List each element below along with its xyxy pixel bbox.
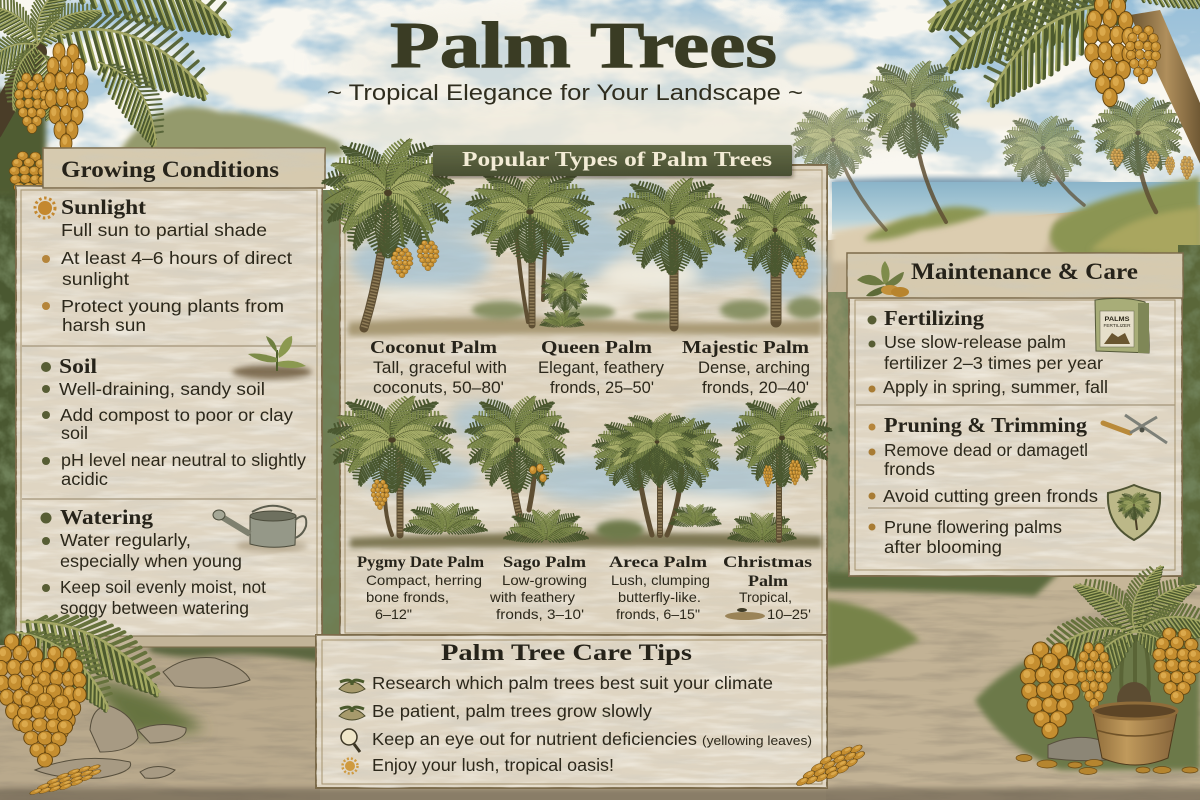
label: christmas palm: Tropical, <box>739 589 792 605</box>
header plank <box>847 253 1183 298</box>
label: queen palm: Elegant, feathery <box>538 359 665 377</box>
section: sunlight <box>35 195 292 335</box>
label: areca palm: butterfly-like. <box>618 589 701 605</box>
label: sago palm: with feathery <box>489 589 575 605</box>
label: pygmy date palm <box>357 554 485 622</box>
icon: fertilizer bag: PALMS <box>1104 317 1130 323</box>
label: sago palm: fronds, 3–10' <box>496 606 584 622</box>
heading: maintenance and care: Maintenance & Care <box>911 259 1138 284</box>
corner foliage: top right <box>928 0 1200 170</box>
banner: popular types heading: Popular Types of Palm Trees <box>462 147 772 171</box>
tree: fourth palm in upper row <box>730 186 820 322</box>
label: pygmy date palm: Pygmy Date Palm <box>357 554 485 571</box>
panel: palm tree care tips <box>316 635 827 788</box>
tree: pygmy date palm <box>326 390 488 540</box>
section: soil <box>41 336 312 489</box>
heading: watering: Watering <box>60 505 154 529</box>
heading: sunlight: Sunlight <box>61 195 146 219</box>
label: pygmy date palm: Compact, herring <box>366 572 482 588</box>
corner foliage: bottom left dates <box>0 597 176 800</box>
text: soil list: soil <box>61 423 88 443</box>
text: soil list: pH level near neutral to slightly <box>61 450 306 470</box>
icon: fertilizer bag: FERTILIZER <box>1104 323 1131 328</box>
heading: growing conditions: Growing Conditions <box>61 157 279 182</box>
label: areca palm: Lush, clumping <box>611 572 710 588</box>
label: queen palm: Queen Palm <box>541 337 652 357</box>
label: majestic palm: Dense, arching <box>698 359 810 377</box>
text: pruning list: Prune flowering palms <box>884 517 1062 537</box>
lower ground <box>0 645 320 800</box>
label: majestic palm: Majestic Palm <box>682 337 809 357</box>
label: areca palm: fronds, 6–15" <box>616 606 700 622</box>
text: sunlight list <box>42 220 292 335</box>
label: coconut palm: coconuts, 50–80' <box>373 379 504 397</box>
text: sunlight list: At least 4–6 hours of direct <box>61 248 292 268</box>
header plank <box>43 148 325 188</box>
panel: maintenance and care <box>847 253 1183 576</box>
text: soil list: acidic <box>61 469 108 489</box>
text: soil list: Well-draining, sandy soil <box>59 379 265 399</box>
label: coconut palm: Tall, graceful with <box>373 359 507 377</box>
side foliage <box>0 180 18 650</box>
icon: shield with palm <box>1108 485 1160 540</box>
icon: leaf and dates <box>857 261 909 297</box>
text: fertilizing list <box>868 332 1108 397</box>
text: pruning list: fronds <box>884 459 935 479</box>
text: pruning list: Avoid cutting green fronds <box>883 486 1098 506</box>
text: fertilizing list: Use slow-release palm <box>884 332 1066 352</box>
icon: seedling <box>232 336 312 379</box>
tip: enjoy: Enjoy your lush, tropical oasis! <box>372 755 614 775</box>
label: coconut palm <box>370 337 507 397</box>
tree: coconut palm <box>320 131 456 328</box>
text: soil list <box>42 379 306 489</box>
tip: patience: Be patient, palm trees grow slowly <box>372 701 652 721</box>
section: watering <box>40 505 308 618</box>
tree: sago palm <box>464 390 589 548</box>
label: queen palm: fronds, 25–50' <box>550 379 654 397</box>
section: fertilizing <box>868 298 1149 397</box>
label: christmas palm <box>723 554 812 622</box>
label: christmas palm: Palm <box>748 573 789 590</box>
text: soil list: Add compost to poor or clay <box>60 405 293 425</box>
section: pruning and trimming <box>868 413 1167 557</box>
icon: sun <box>35 198 55 218</box>
tip: research: Research which palm trees best suit your climate <box>372 673 773 693</box>
panel: growing conditions <box>14 148 325 647</box>
icon: small nest <box>725 608 765 620</box>
subtitle: ~ Tropical Elegance for Your Landscape ~ <box>327 80 803 105</box>
icon: fertilizer bag <box>1095 298 1149 353</box>
heading: pruning and trimming: Pruning & Trimming <box>884 413 1088 437</box>
text: sunlight list: Protect young plants from <box>61 296 284 316</box>
text: pruning list <box>868 440 1098 557</box>
text: fertilizing list: Apply in spring, summer, fall <box>883 377 1108 397</box>
label: majestic palm <box>682 337 810 397</box>
label: queen palm <box>538 337 665 397</box>
background palm trees <box>790 55 1194 230</box>
heading: fertilizing: Fertilizing <box>884 306 985 330</box>
text: sunlight list: sunlight <box>62 269 129 289</box>
text: sunlight list: Full sun to partial shade <box>61 220 267 240</box>
title: Palm Trees <box>390 9 777 82</box>
panel: popular types of palm trees <box>320 131 833 638</box>
label: areca palm <box>609 554 710 622</box>
text: pruning list: Remove dead or damagetl <box>884 440 1088 460</box>
tip: nutrient deficiencies: (yellowing leaves) <box>702 733 812 748</box>
text: fertilizing list: fertilizer 2–3 times per year <box>884 353 1103 373</box>
tip: nutrient deficiencies <box>341 729 812 752</box>
text: watering list: Water regularly, <box>60 530 191 550</box>
tree: majestic palm <box>613 172 731 327</box>
terracotta pot <box>1093 707 1177 765</box>
rocks <box>35 658 1106 778</box>
text: sunlight list: harsh sun <box>62 315 146 335</box>
text: watering list: especially when young <box>60 551 242 571</box>
label: majestic palm: fronds, 20–40' <box>702 379 809 397</box>
label: pygmy date palm: bone fronds, <box>366 589 449 605</box>
banner: popular types heading <box>433 145 792 176</box>
corner foliage: top left <box>0 0 237 206</box>
tip: nutrient deficiencies: Keep an eye out for nutrient deficiencies <box>372 729 697 749</box>
label: sago palm <box>489 554 587 622</box>
beach shrubs <box>865 207 990 240</box>
tree: christmas palm <box>727 392 833 548</box>
label: areca palm: Areca Palm <box>609 554 708 571</box>
icon: pruning shears <box>1103 415 1167 443</box>
tree: queen palm <box>464 164 596 330</box>
tree: areca palm <box>591 409 723 535</box>
text: watering list: soggy between watering <box>60 598 249 618</box>
illustration: dates on ground near tips panel <box>792 739 869 794</box>
text: watering list <box>42 530 266 618</box>
distant hills <box>120 107 345 155</box>
scenery: upper row <box>348 181 825 336</box>
heading: soil: Soil <box>59 354 97 378</box>
label: sago palm: Low-growing <box>502 572 587 588</box>
label: christmas palm: Christmas <box>723 554 812 571</box>
text: watering list: Keep soil evenly moist, not <box>60 577 266 597</box>
text: pruning list: after blooming <box>884 537 1002 557</box>
label: pygmy date palm: 6–12" <box>375 606 412 622</box>
label: coconut palm: Coconut Palm <box>370 337 497 357</box>
icon: watering can <box>213 506 308 552</box>
label: christmas palm: 10–25' <box>767 606 811 622</box>
heading: care tips: Palm Tree Care Tips <box>441 640 692 665</box>
illustration: potted palm with dates <box>1016 560 1200 774</box>
label: sago palm: Sago Palm <box>503 554 587 571</box>
scenery: lower row <box>350 402 822 548</box>
